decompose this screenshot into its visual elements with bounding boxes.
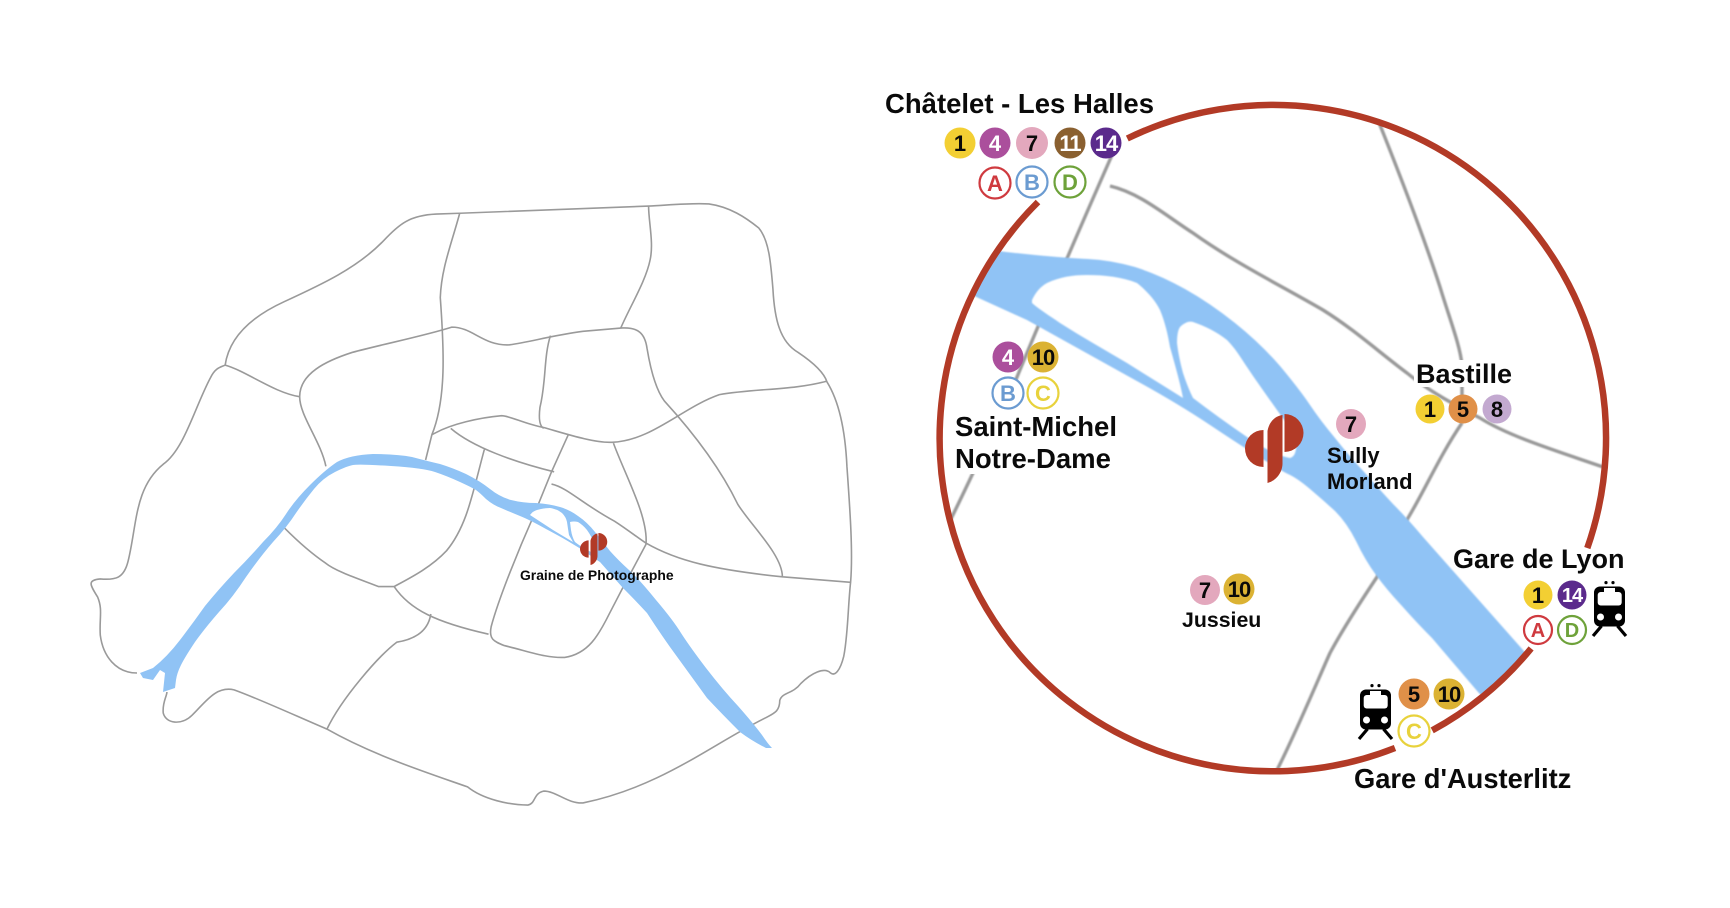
lines — [1190, 574, 1254, 605]
icon: train — [1359, 684, 1392, 739]
RER lines: B — [1024, 170, 1040, 195]
station: Saint-Michel Notre-Dame — [952, 342, 1124, 474]
lines: 10 — [1032, 345, 1055, 370]
metro lines: 11 — [1059, 131, 1081, 156]
label background — [1414, 360, 1512, 387]
metro lines — [944, 127, 1122, 159]
station name: Jussieu — [1182, 608, 1261, 632]
lines: C — [1035, 381, 1051, 406]
RER lines: D — [1062, 170, 1078, 195]
RER lines: A — [987, 171, 1003, 196]
map of Paris arrondissements — [91, 204, 851, 805]
lines: 4 — [1002, 345, 1015, 370]
river Seine on overview map — [140, 454, 772, 748]
lines: 10 — [1438, 682, 1461, 707]
label background — [952, 408, 1124, 474]
lines: A — [1531, 620, 1545, 642]
red circle outline — [940, 105, 1606, 771]
station: Jussieu — [1182, 574, 1261, 632]
station name: Notre-Dame — [955, 443, 1111, 474]
station: Gare d'Austerlitz — [1354, 678, 1571, 794]
lines: B — [1000, 381, 1016, 406]
station name: Bastille — [1416, 359, 1512, 389]
lines — [1398, 678, 1464, 746]
metro lines: 7 — [1026, 131, 1038, 156]
lines: 8 — [1491, 397, 1503, 422]
station name: Sully — [1327, 443, 1380, 468]
lines: D — [1565, 620, 1579, 642]
station name: Saint-Michel — [955, 411, 1117, 442]
lines: 7 — [1199, 578, 1211, 603]
lines — [992, 342, 1058, 408]
line number: 7 — [1345, 412, 1357, 437]
station: Sully Morland — [1327, 409, 1413, 494]
line 7 — [1336, 409, 1366, 439]
lines: 5 — [1457, 397, 1469, 422]
icon: large logo — [1245, 414, 1304, 483]
metro lines: 1 — [954, 131, 966, 156]
lines — [1524, 580, 1586, 644]
station name: Gare d'Austerlitz — [1354, 763, 1571, 794]
lines: C — [1406, 719, 1422, 744]
lines: 5 — [1408, 682, 1420, 707]
RER lines — [980, 166, 1086, 198]
lines: 10 — [1228, 577, 1251, 602]
label: Graine de Photographe: Graine de Photographe — [520, 567, 674, 583]
lines: 1 — [1532, 583, 1544, 608]
zoomed neighbourhood circle map — [885, 88, 1626, 794]
lines: 1 — [1424, 397, 1436, 422]
river islands — [1032, 275, 1183, 398]
icon: small logo — [580, 533, 607, 565]
river Seine in detail — [974, 250, 1525, 695]
station name: Morland — [1327, 469, 1413, 494]
icon: train — [1593, 581, 1626, 636]
station name: Gare de Lyon — [1453, 544, 1625, 574]
station: Gare de Lyon — [1453, 544, 1626, 644]
station name: Châtelet - Les Halles — [885, 88, 1154, 119]
station: Bastille — [1414, 359, 1512, 424]
arrondissement boundaries — [91, 204, 851, 805]
metro lines: 4 — [989, 131, 1002, 156]
lines: 14 — [1562, 585, 1584, 607]
metro lines: 14 — [1095, 131, 1119, 156]
lines — [1416, 394, 1512, 424]
station: Châtelet - Les Halles — [885, 88, 1154, 198]
streets — [948, 120, 1606, 772]
